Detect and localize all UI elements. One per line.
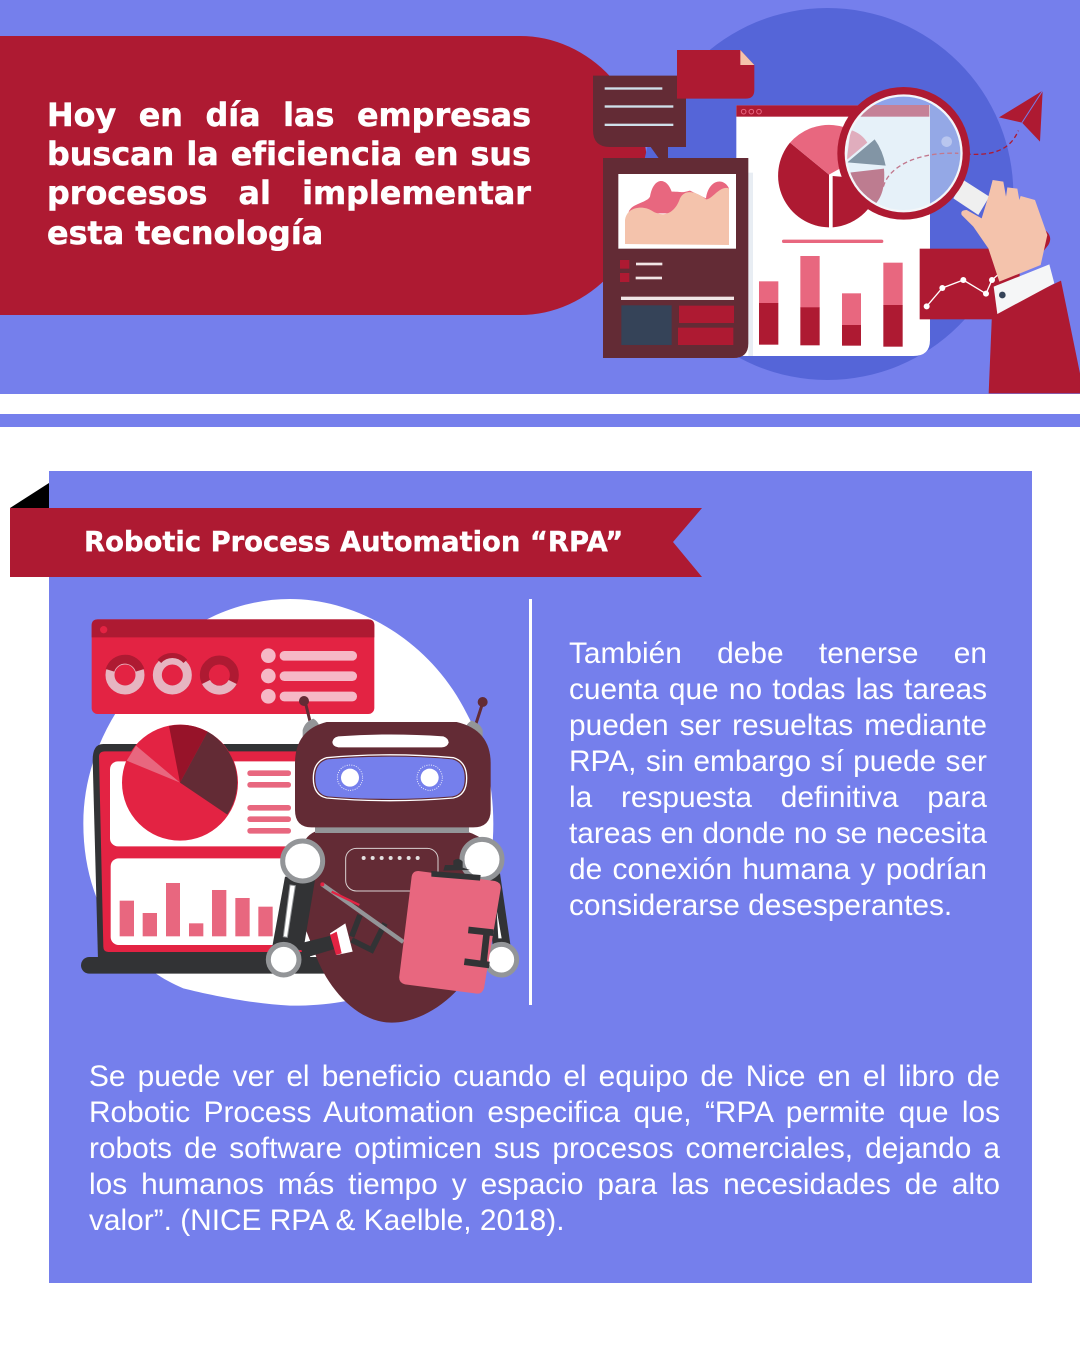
antennas bbox=[299, 696, 488, 743]
line chart card bbox=[920, 249, 1020, 319]
paragraph: tasks suited to RPA: También debe tenerse en bbox=[569, 637, 987, 670]
red button behind hand bbox=[1042, 230, 1050, 253]
paragraph: tasks suited to RPA: considerarse desesperantes. bbox=[569, 889, 952, 922]
body bbox=[300, 832, 497, 1023]
report page bbox=[736, 105, 930, 356]
stacked bars bbox=[759, 256, 903, 347]
paper plane with dashed trail bbox=[958, 91, 1043, 154]
paragraph: benefit quote: robots de software optimicen sus procesos comerciales, dejando a bbox=[89, 1132, 1000, 1165]
speech bubble bbox=[593, 76, 686, 160]
header text: procesos al implementar bbox=[47, 175, 531, 212]
paragraph: tasks suited to RPA: la respuesta definitiva para bbox=[569, 781, 987, 814]
paragraph: tasks suited to RPA: cuenta que no todas las tareas bbox=[569, 673, 987, 706]
vertical divider bbox=[529, 599, 532, 1005]
main blue panel bbox=[49, 471, 1032, 1283]
paragraph: benefit quote bbox=[89, 1060, 1000, 1237]
head bbox=[295, 722, 491, 827]
folded note bbox=[677, 50, 754, 99]
paragraph: benefit quote: valor”. (NICE RPA & Kaelble, 2018). bbox=[89, 1204, 564, 1237]
illustration: robot with laptop bbox=[81, 599, 517, 1023]
paragraph: benefit quote: Robotic Process Automation especifica que, “RPA permite que los bbox=[89, 1096, 1000, 1129]
donut gauges bbox=[110, 655, 234, 690]
dashboard card bbox=[92, 619, 374, 714]
paragraph: tasks suited to RPA bbox=[569, 637, 987, 922]
header text bbox=[47, 97, 532, 252]
top background band bbox=[0, 0, 1080, 394]
header text: esta tecnología bbox=[47, 215, 323, 252]
bars bbox=[120, 901, 134, 936]
pie chart bbox=[122, 725, 238, 841]
header text: buscan la eficiencia en sus bbox=[47, 136, 531, 173]
dark blue circle bbox=[641, 8, 1013, 380]
arms bbox=[272, 873, 512, 958]
paragraph: tasks suited to RPA: tareas en donde no se necesita bbox=[569, 817, 987, 850]
clipboard bbox=[399, 859, 501, 994]
robot bbox=[268, 696, 517, 1023]
shirt cuff bbox=[994, 264, 1054, 314]
magnifying glass bbox=[837, 87, 989, 222]
sleeve bbox=[989, 281, 1080, 393]
header red shape bbox=[0, 36, 648, 315]
paragraph: tasks suited to RPA: de conexión humana y podrían bbox=[569, 853, 987, 886]
laptop bbox=[81, 725, 334, 974]
hand bbox=[961, 180, 1047, 282]
thin divider band bbox=[0, 414, 1080, 427]
banner ribbon bbox=[10, 483, 702, 577]
joints bbox=[268, 839, 517, 975]
banner title: Robotic Process Automation “RPA” bbox=[84, 527, 623, 558]
dark tablet bbox=[603, 158, 748, 358]
chest panel bbox=[346, 848, 438, 891]
paragraph: benefit quote: los humanos más tiempo y espacio para las necesidades de alto bbox=[89, 1168, 1000, 1201]
header text: Hoy en día las empresas bbox=[47, 97, 531, 134]
paragraph: tasks suited to RPA: RPA, sin embargo sí puede ser bbox=[569, 745, 987, 778]
paragraph: tasks suited to RPA: pueden ser resueltas mediante bbox=[569, 709, 987, 742]
pie chart bbox=[778, 125, 880, 227]
white blob bbox=[83, 599, 493, 1006]
illustration: data analysis with magnifier bbox=[593, 8, 1080, 393]
visor bbox=[313, 755, 467, 801]
paragraph: benefit quote: Se puede ver el beneficio cuando el equipo de Nice en el libro de bbox=[89, 1060, 1000, 1093]
